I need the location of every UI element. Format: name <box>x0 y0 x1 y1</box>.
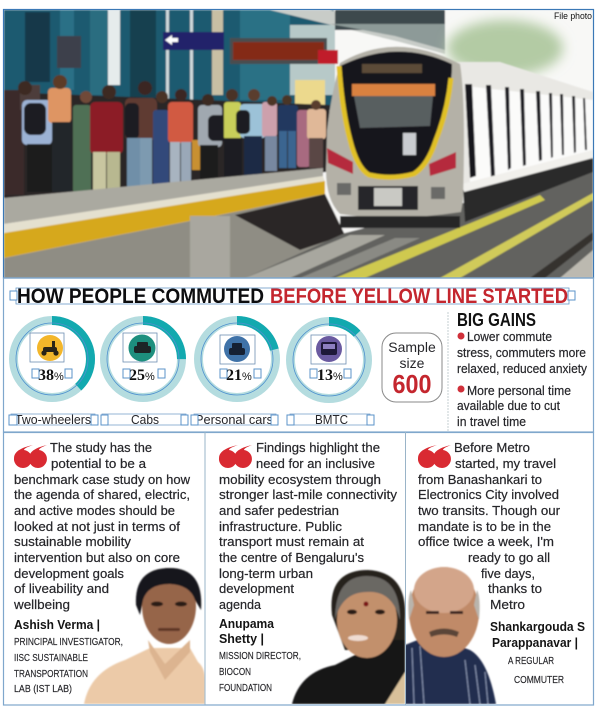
quote text: two transits. Though our <box>418 503 561 518</box>
crowd <box>4 75 330 200</box>
quote text: five days, <box>481 566 535 581</box>
label: BMTC: BMTC <box>315 412 348 427</box>
track <box>245 170 593 278</box>
quote text: ready to go all <box>468 550 550 565</box>
panel: sample size: Sample <box>388 339 436 355</box>
quote text: wellbeing <box>13 597 70 612</box>
panel: sample size: size <box>400 355 425 371</box>
quote text: agenda <box>219 597 262 612</box>
label: two-wheelers: Two-wheelers <box>15 412 91 427</box>
display board <box>230 38 327 64</box>
attribution: PRINCIPAL INVESTIGATOR, <box>14 637 123 648</box>
quote text: Electronics City involved <box>418 487 559 502</box>
bullet: lower commute stress: relaxed, reduced anxiety <box>457 361 587 376</box>
icon: cab <box>128 334 156 362</box>
icon: quote mark <box>219 445 252 468</box>
platform <box>4 168 345 278</box>
attribution: LAB (IST LAB) <box>14 684 72 695</box>
donut: two-wheelers 38% <box>14 320 90 398</box>
label: cabs <box>101 412 188 427</box>
quote text: need for an inclusive <box>256 456 375 471</box>
attribution: IISC SUSTAINABLE <box>14 653 88 664</box>
quote text: and safer pedestrian <box>219 503 339 518</box>
attribution: Parappanavar | <box>492 635 578 650</box>
quote text: development <box>219 581 294 596</box>
quote text: of liveability and <box>14 581 109 596</box>
quote text: potential to be a <box>51 456 147 471</box>
quote text <box>13 440 191 612</box>
donut: two-wheelers 38%: 38% <box>38 367 64 384</box>
quote text: development goals <box>14 566 124 581</box>
quote text: The study has the <box>50 440 152 455</box>
attribution: A REGULAR <box>508 656 554 667</box>
arrow: exit direction <box>165 35 178 45</box>
panel: Shankargouda quote <box>405 440 585 704</box>
attribution <box>490 619 585 686</box>
label: BMTC <box>287 412 374 427</box>
label: personal cars: Personal cars <box>195 412 273 427</box>
donut: personal cars 21%: 21% <box>226 367 252 384</box>
quote text: the agenda of shared, electric, <box>14 487 190 502</box>
quote text <box>219 440 398 612</box>
icon: quote mark <box>418 445 451 468</box>
heading: big gains: BIG GAINS <box>457 310 536 330</box>
panel: Anupama Shetty quote <box>219 440 405 704</box>
attribution <box>14 617 123 695</box>
icon: direction sign <box>163 32 224 50</box>
quote text: long-term urban <box>219 566 313 581</box>
donut: BMTC 13% <box>290 322 368 398</box>
quote text: the centre of Bengaluru's <box>219 550 364 565</box>
quote text: started, my travel <box>455 456 556 471</box>
bullet: more personal time: available due to cut <box>457 398 560 413</box>
donut: cabs 25%: 25% <box>129 367 155 384</box>
quote text: Before Metro <box>454 440 530 455</box>
title: BEFORE YELLOW LINE STARTED <box>270 285 568 308</box>
icon: personal car <box>224 336 250 362</box>
icon: bus <box>316 336 342 362</box>
label: cabs: Cabs <box>131 412 159 427</box>
icon: quote mark <box>14 445 47 468</box>
title <box>10 285 575 308</box>
attribution: MISSION DIRECTOR, <box>219 651 301 662</box>
quote text: sustainable mobility <box>14 534 132 549</box>
quote text: looked at not just in terms of <box>14 519 180 534</box>
quote text: office twice a week, I'm <box>418 534 554 549</box>
quote text: benchmark case study on how <box>14 472 191 487</box>
bullet: more personal time: More personal time <box>467 383 571 398</box>
quote text: Metro <box>490 597 525 612</box>
quote text: mandate is to be in the <box>418 519 551 534</box>
donut: personal cars 21% <box>198 320 276 398</box>
attribution: Shetty | <box>219 631 264 646</box>
bullet: more personal time <box>457 383 571 429</box>
portrait: Shankargouda <box>405 567 496 704</box>
train <box>326 47 593 228</box>
title: HOW PEOPLE COMMUTED <box>17 285 264 308</box>
attribution: Anupama <box>219 616 275 631</box>
donut: cabs 25% <box>104 320 182 398</box>
quote text: stronger last-mile connectivity <box>219 487 398 502</box>
attribution: Ashish Verma | <box>14 617 100 632</box>
donut: BMTC 13%: 13% <box>317 367 343 384</box>
bullet: lower commute stress: stress, commuters more <box>457 345 586 360</box>
quote text: Findings highlight the <box>256 440 380 455</box>
panel: big gains <box>457 310 587 429</box>
panel: Ashish Verma quote <box>13 440 205 704</box>
quote text: from Banashankari to <box>418 472 542 487</box>
portrait: Anupama Shetty <box>292 570 405 704</box>
quote text: infrastructure. Public <box>219 519 343 534</box>
attribution: Shankargouda S <box>490 619 585 634</box>
quote text <box>418 440 561 612</box>
quote text: and active modes should be <box>14 503 175 518</box>
attribution <box>219 616 301 694</box>
panel: sample size <box>382 333 442 402</box>
quote text: intervention but also on core <box>14 550 180 565</box>
icon: scooter <box>37 335 63 361</box>
attribution: FOUNDATION <box>219 683 272 694</box>
bullet: more personal time: in travel time <box>457 414 526 429</box>
portrait: Ashish Verma <box>84 568 205 704</box>
quote text: transport must remain at <box>219 534 364 549</box>
quote text: mobility ecosystem through <box>219 472 381 487</box>
attribution: COMMUTER <box>514 675 564 686</box>
panel: sample size: 600 <box>392 369 432 399</box>
panel: station photo <box>4 10 593 278</box>
bullet: lower commute stress: Lower commute <box>467 329 552 344</box>
photo credit: File photo <box>554 11 592 21</box>
attribution: BIOCON <box>219 667 251 678</box>
attribution: TRANSPORTATION <box>14 669 88 680</box>
quote text: thanks to <box>488 581 542 596</box>
bullet: lower commute stress <box>457 329 587 376</box>
